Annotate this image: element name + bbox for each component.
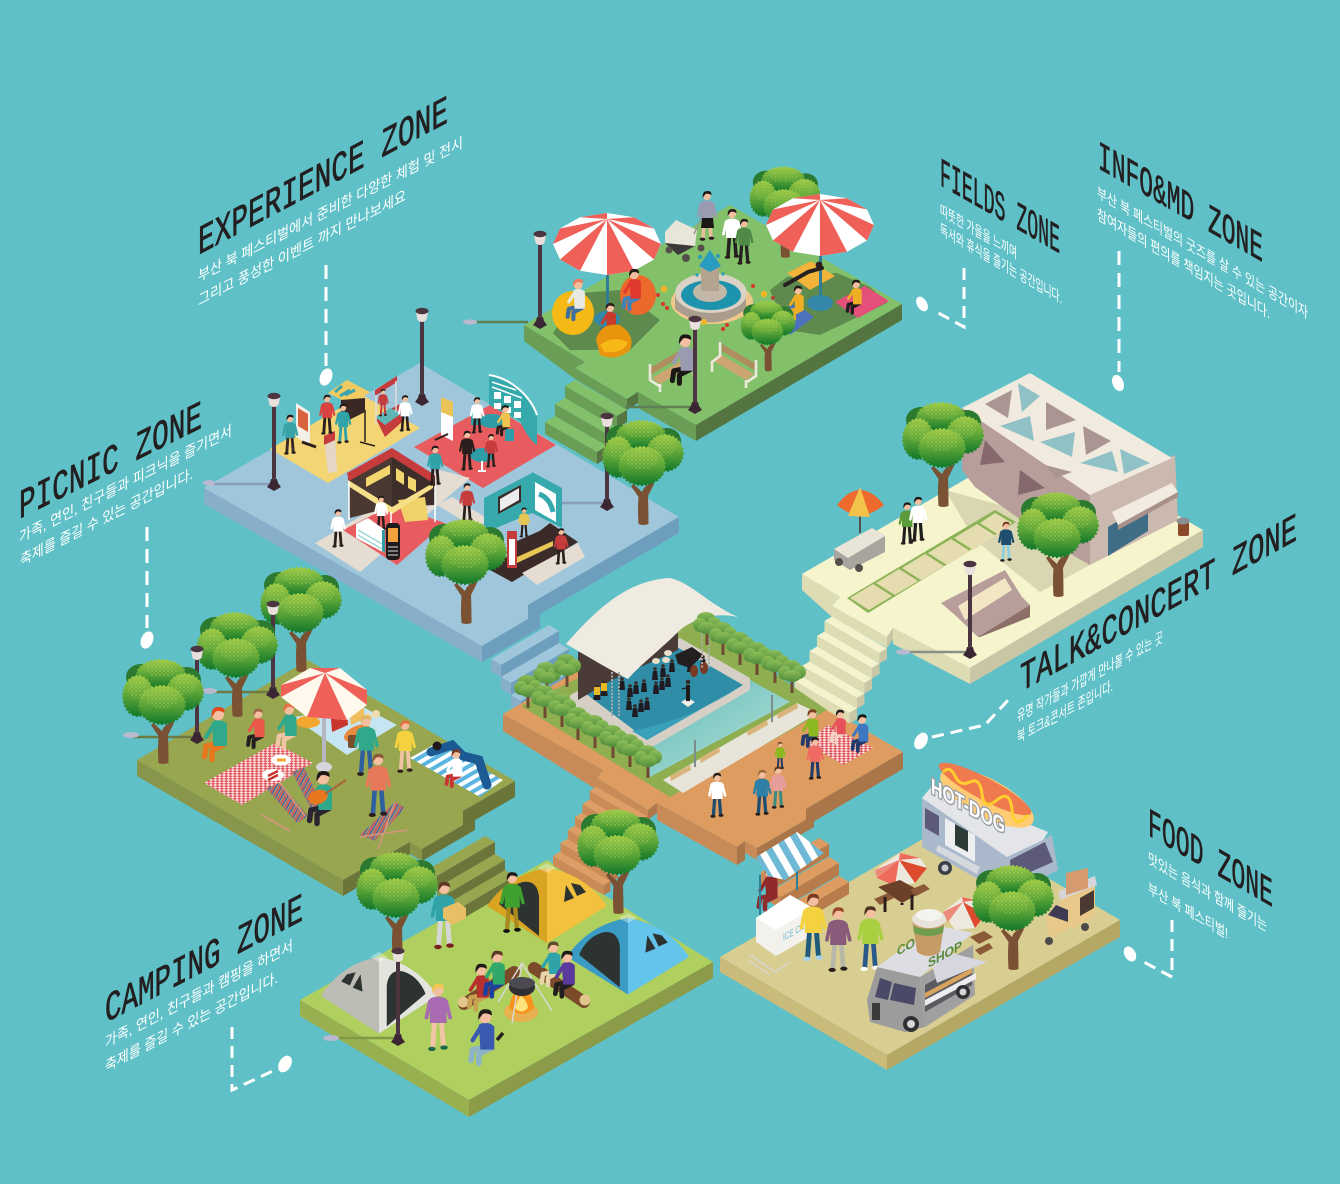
scene: camping zone [321,810,689,1064]
paved path [847,510,1016,613]
coffee truck [867,925,987,1032]
lamp [391,948,405,1046]
conductor on podium [681,680,695,707]
checkered blanket [204,743,313,805]
roof [566,578,738,679]
coffee sign left: CO [897,934,915,959]
brochure rack [360,410,375,446]
booth with dark walls [343,448,445,565]
label: food zone [1121,802,1273,977]
beanbag seats with readers [552,269,656,358]
middle tree [197,613,277,717]
platform: talk and concert zone [503,617,903,928]
callout leader [138,527,156,651]
callout leader [911,698,1010,752]
ice cream lettering: ICE CRE [783,918,809,944]
description: 맛있는 음식과 함께 즐기는 [1148,850,1267,935]
food blanket [293,707,397,755]
description: 독서와 휴식을 즐기는 공간입니다. [940,221,1062,307]
floor banner [324,431,337,473]
lamp shadow ends [123,688,217,738]
lamp shadows [132,692,273,737]
ground shadow [945,490,1090,592]
walkway [663,703,818,793]
lamps [533,231,702,414]
right umbrella [766,194,874,311]
camper at tent [502,872,523,933]
callout leader [914,268,964,327]
visitors [331,446,474,548]
description: 그리고 풍성한 이벤트 까지 만나보세요 [198,187,406,310]
back tree [261,568,341,672]
people in first booth [283,389,412,455]
platform: picnic zone [137,660,515,922]
meeting tables and people [460,397,514,471]
label: info and md zone [1097,135,1308,393]
second table umbrella [943,897,993,955]
campfire [504,988,538,1022]
scene: experience zone [203,308,683,624]
deck chairs [262,767,407,849]
label: camping zone [105,887,303,1090]
lamp shadow [904,651,968,653]
title: PICNIC ZONE [19,394,202,532]
orchestra [593,647,708,717]
trees [903,403,1098,597]
left umbrella [553,213,661,327]
tree behind umbrella [750,167,820,258]
description: 가족, 연인, 친구들과 피크닉을 즐기면서 [19,422,232,547]
trees [426,421,683,624]
food zone tree [973,866,1053,970]
hot dog on roof [932,755,1042,839]
callout leader [1121,920,1172,977]
truss towers [612,620,709,716]
woman on bench [672,334,693,383]
kneeling man with hammer [471,1009,503,1064]
text: FIELDS ZONE [940,152,1060,266]
description: 유명 작가들과 가깝게 만나볼 수 있는 곳 [1017,629,1163,726]
label: talk and concert zone [911,506,1297,752]
title: EXPERIENCE ZONE [198,89,448,268]
description: 북 토크&콘서트 존입니다. [1017,677,1113,747]
front hedge trees [514,675,662,778]
table umbrella [874,853,930,912]
back lamp [266,601,280,699]
tent: blue [567,913,689,994]
logs [458,968,590,1008]
description [1097,184,1308,323]
awning [756,832,824,915]
platform: fields zone [524,205,902,464]
tent: yellow [487,863,607,943]
brochure table [328,380,370,422]
picnic blanket [805,725,873,765]
carpet: red lounge [414,405,556,488]
faceted building [962,373,1178,565]
back hedge trees [533,612,806,695]
picnic umbrella [281,668,367,772]
tent: grey [321,952,437,1034]
lounge mats [782,261,889,335]
woman in purple [427,984,450,1051]
customers [802,894,882,972]
callout leader [1110,251,1126,393]
carpet: yellow [270,395,420,483]
lamp shadow [330,1037,395,1039]
coffee cup [912,909,946,956]
curved teal wall [489,375,537,445]
lamps [267,308,614,511]
cooking pot on tripod [498,963,552,1023]
camper carrying box [433,882,466,949]
beige walkway [315,470,470,572]
roll-up banner [435,397,453,441]
scene: talk and concert stage [514,578,873,818]
people on towel [431,742,487,786]
description: 축제를 즐길 수 있는 공간입니다. [105,969,278,1076]
food cart with umbrella [834,487,885,572]
description: 가족, 연인, 친구들과 캠핑을 하면서 [105,937,293,1052]
front tree [123,660,203,764]
shade under left umbrella [553,290,660,350]
description: 축제를 즐길 수 있는 공간입니다. [20,465,193,570]
callout leader [317,265,335,388]
coffee sign right: SHOP [928,937,962,971]
lamp end shadow [896,649,910,655]
seated family [204,703,296,760]
stage deck [585,647,743,740]
fountain [671,250,753,324]
label: fields zone [914,152,1062,327]
platform: info and md zone [794,436,1203,724]
lamp shadow end [323,1035,339,1041]
striped towel [410,743,503,797]
label: picnic zone [19,394,232,651]
standing guests [356,715,414,817]
platform: experience zone [204,363,679,713]
lamp shadows [210,483,272,485]
benches [650,342,756,392]
ice cream cart [748,865,813,975]
description [198,134,463,310]
pond [640,680,790,777]
scene: fields zone [472,167,889,414]
trash bin [1176,518,1190,536]
scene: picnic zone [123,568,503,849]
back wall [578,633,678,700]
tree [357,853,437,957]
shade under right umbrella [770,273,887,335]
description: 참여자들의 편의를 책임지는 곳입니다. [1097,206,1270,323]
title: CAMPING ZONE [105,887,303,1036]
red info stand [375,376,402,437]
guitarist [306,771,346,824]
label: experience zone [198,89,463,388]
people standing by fountain [698,191,752,265]
platform: camping zone [300,860,713,1117]
front lamp [190,646,204,744]
description: 따뜻한 가을을 느끼며 [940,202,1017,263]
green border [521,620,827,797]
hot dog truck [922,785,1058,893]
kiosk [386,523,400,560]
fields tree [741,302,795,371]
people relaxing on mats [785,262,862,319]
stroller [665,214,704,262]
callout leader [232,1027,295,1090]
stage base [570,638,750,750]
tree [578,810,658,914]
teal booth [484,472,585,585]
poster standee [296,403,316,447]
description: 부산 북 페스티벌! [1148,880,1228,943]
description [1148,850,1267,943]
walkway benches and posts [670,695,798,781]
scene: food zone [748,755,1097,1032]
description: 부산 북 페스티벌에서 준비한 다양한 체험 및 전시 [198,134,463,286]
tuk-tuk kiosk [1045,868,1097,945]
lounge sculpture bench [941,570,1030,637]
visitors on plaza [709,709,868,818]
people at entrance [900,497,1013,562]
flowers [656,284,775,331]
scene: info and md zone [834,373,1190,659]
reception desk [356,496,387,553]
lamp [963,561,977,659]
hot dog lettering: HOT-DOG [931,774,1005,840]
platform: food zone [720,822,1120,1070]
lamp shadows [472,322,695,407]
campers seated on logs [469,941,575,1009]
picnic food [262,708,380,781]
